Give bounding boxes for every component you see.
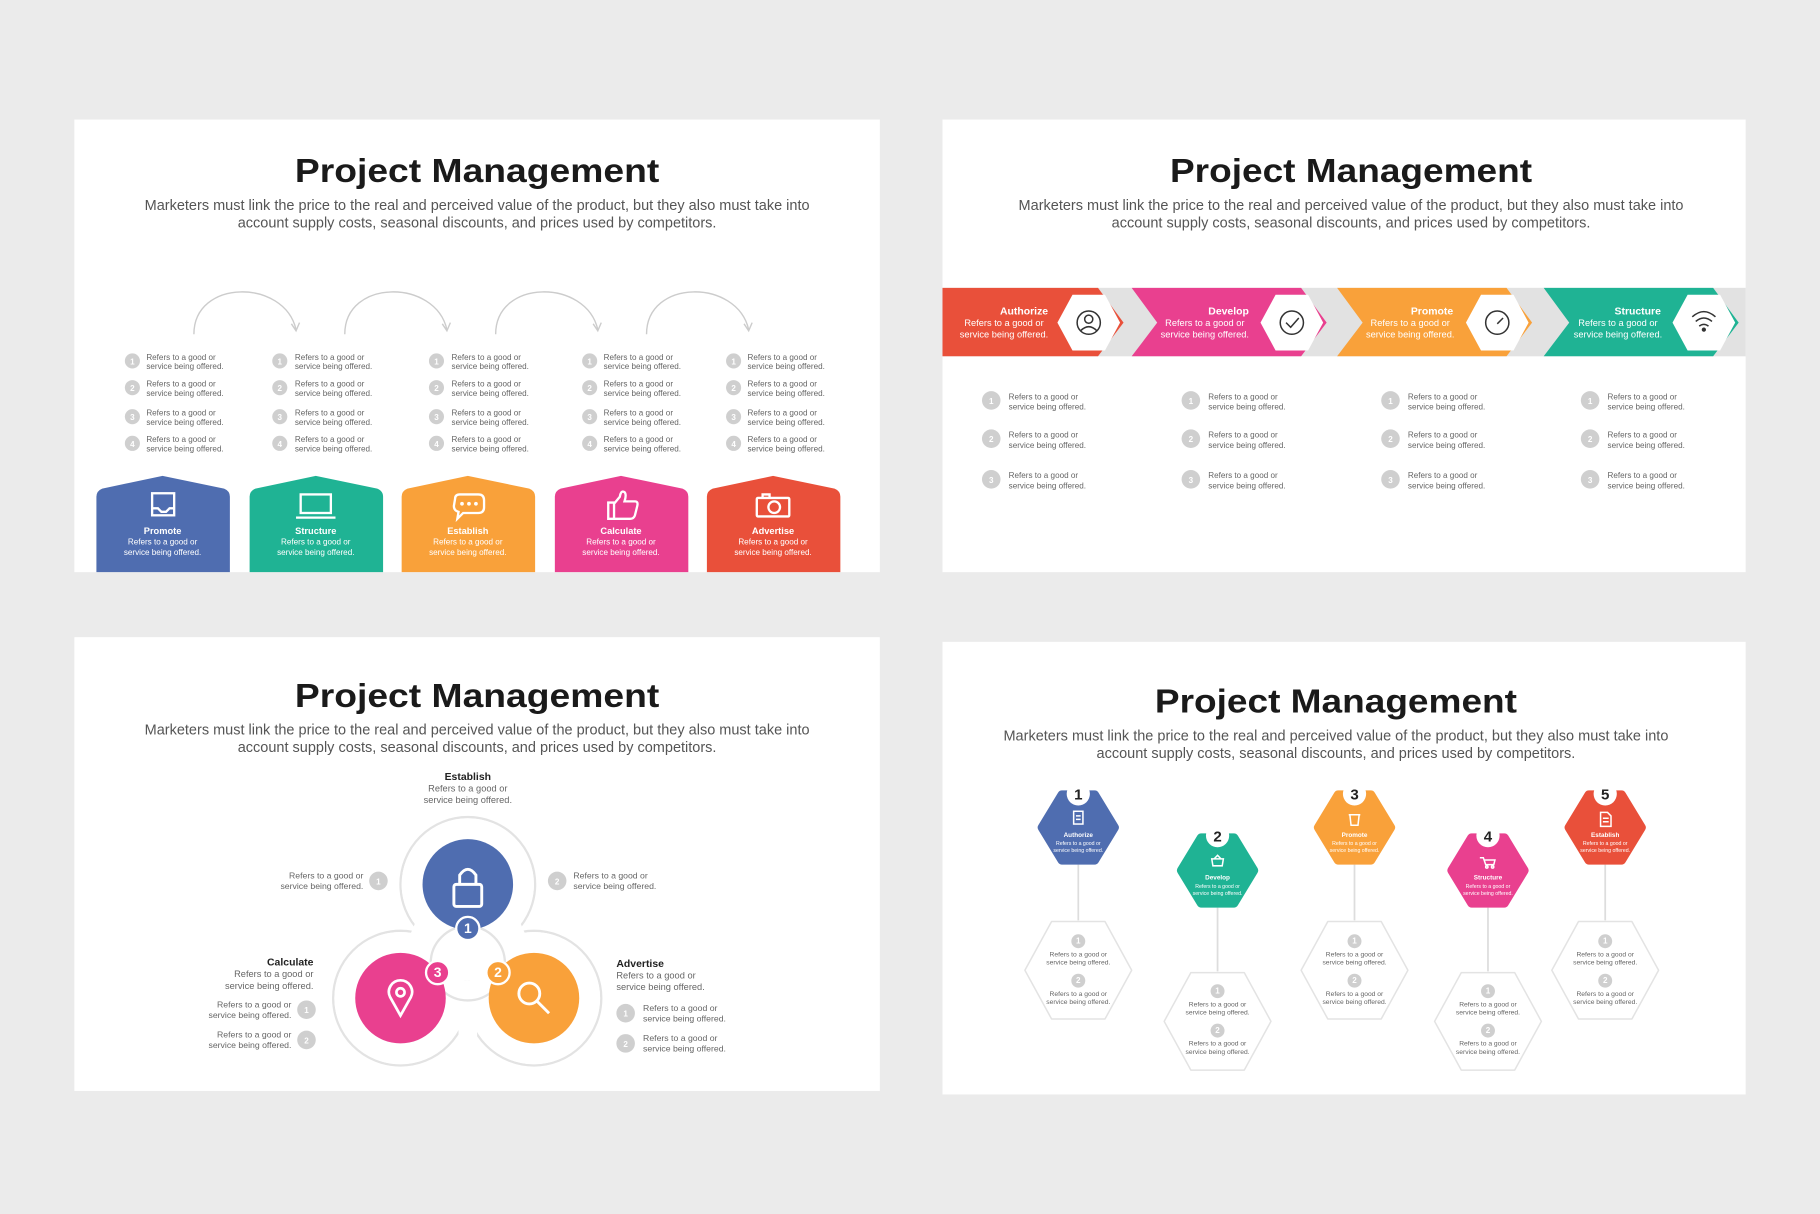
label: Establish bbox=[424, 772, 512, 805]
panel: bottom-left trefoil bbox=[74, 637, 880, 1091]
numbered lists: service being offered. bbox=[1009, 482, 1086, 491]
numbered lists: Refers to a good or bbox=[146, 379, 216, 388]
numbered lists: service being offered. bbox=[146, 444, 224, 453]
icon: check bbox=[1280, 311, 1303, 334]
step 5 Establish: Establish bbox=[1591, 832, 1619, 839]
numbered lists: Refers to a good or bbox=[1009, 431, 1078, 440]
numbered lists: 4 bbox=[130, 440, 135, 449]
numbered lists: 1 bbox=[1189, 397, 1194, 406]
numbered lists: 3 bbox=[278, 413, 283, 422]
step 2 Develop: Develop bbox=[1205, 875, 1230, 882]
numbered lists: Refers to a good or bbox=[1009, 392, 1078, 401]
label: Calculate: 1 bbox=[304, 1006, 309, 1015]
items: top left and right: 2 bbox=[555, 877, 560, 886]
card: Promote: service being offered. bbox=[124, 548, 201, 557]
numbered lists bbox=[125, 353, 825, 453]
step 5 Establish: 5 bbox=[1601, 787, 1609, 804]
items: top left and right: service being offered. bbox=[573, 881, 656, 891]
title: Project Management bbox=[295, 678, 659, 715]
label: Advertise: Refers to a good or bbox=[643, 1033, 718, 1043]
label: Calculate: service being offered. bbox=[208, 1040, 291, 1050]
detail texts: 2 bbox=[1603, 976, 1608, 985]
numbered lists: 2 bbox=[1189, 435, 1194, 444]
numbered lists: service being offered. bbox=[604, 362, 681, 371]
segment: Structure bbox=[1544, 288, 1739, 356]
card: Promote: Promote bbox=[144, 526, 181, 536]
subtitle bbox=[145, 198, 810, 231]
step 5 Establish: Refers to a good or bbox=[1583, 841, 1628, 847]
numbered lists: 2 bbox=[731, 384, 736, 393]
card: Structure: Structure bbox=[295, 526, 336, 536]
card: Structure: Refers to a good or bbox=[281, 537, 351, 546]
numbered lists: service being offered. bbox=[1009, 403, 1086, 412]
detail texts: service being offered. bbox=[1046, 999, 1110, 1006]
numbered lists: service being offered. bbox=[748, 362, 825, 371]
detail texts: Refers to a good or bbox=[1576, 951, 1635, 958]
label: Advertise: Refers to a good or bbox=[616, 970, 696, 980]
numbered lists: 4 bbox=[278, 440, 283, 449]
numbered lists: service being offered. bbox=[146, 418, 224, 427]
label: Calculate: Calculate bbox=[267, 958, 314, 969]
numbered lists: 4 bbox=[434, 440, 439, 449]
detail texts: service being offered. bbox=[1456, 1009, 1520, 1016]
numbered lists: service being offered. bbox=[1608, 441, 1685, 450]
detail texts: service being offered. bbox=[1456, 1049, 1520, 1056]
icon: lock bbox=[454, 869, 482, 906]
label: Establish: service being offered. bbox=[424, 795, 512, 805]
numbered lists: Refers to a good or bbox=[1608, 392, 1677, 401]
label: Advertise bbox=[616, 959, 726, 1054]
label: Advertise: 2 bbox=[623, 1040, 628, 1049]
numbered lists: Refers to a good or bbox=[1009, 471, 1078, 480]
numbered lists: service being offered. bbox=[1608, 482, 1685, 491]
detail texts: 1 bbox=[1486, 986, 1491, 995]
numbered lists: service being offered. bbox=[1408, 403, 1485, 412]
step 4 Structure: Refers to a good or bbox=[1466, 884, 1511, 890]
subtitle: account supply costs, seasonal discounts, and prices used by competitors. bbox=[1112, 215, 1590, 231]
detail texts: service being offered. bbox=[1046, 959, 1110, 966]
items: top left and right: Refers to a good or bbox=[289, 871, 363, 881]
badges: 2 bbox=[494, 964, 502, 980]
numbered lists: 2 bbox=[1588, 435, 1593, 444]
label: Calculate: service being offered. bbox=[208, 1010, 291, 1020]
card: Structure bbox=[250, 476, 383, 572]
step 3 Promote: 3 bbox=[1350, 787, 1359, 804]
numbered lists: Refers to a good or bbox=[748, 435, 817, 444]
numbered lists: Refers to a good or bbox=[146, 408, 216, 417]
segment: Structure: Refers to a good or bbox=[1578, 318, 1658, 328]
panel: top-left arrows and houses bbox=[74, 120, 880, 572]
label: Advertise: service being offered. bbox=[643, 1013, 726, 1023]
step 4 Structure: service being offered. bbox=[1463, 891, 1513, 897]
subtitle: account supply costs, seasonal discounts, and prices used by competitors. bbox=[238, 740, 716, 756]
numbered lists: Refers to a good or bbox=[295, 379, 365, 388]
numbered lists: 3 bbox=[1588, 476, 1593, 485]
numbered lists: Refers to a good or bbox=[604, 379, 673, 388]
icon: clipboard bbox=[1074, 811, 1083, 824]
numbered lists: Refers to a good or bbox=[452, 435, 521, 444]
subtitle: Marketers must link the price to the real and perceived value of the product, but they also must take into bbox=[1019, 198, 1684, 214]
numbered lists: Refers to a good or bbox=[604, 408, 673, 417]
numbered lists: 1 bbox=[731, 357, 736, 366]
step 5 Establish bbox=[1569, 782, 1641, 860]
detail texts: Refers to a good or bbox=[1050, 951, 1108, 958]
step 2 Develop: 2 bbox=[1213, 828, 1222, 845]
items: top left and right: 1 bbox=[376, 877, 381, 886]
detail texts: 1 bbox=[1603, 937, 1608, 946]
detail texts: 2 bbox=[1352, 976, 1357, 985]
label: Calculate: Refers to a good or bbox=[217, 1030, 291, 1040]
numbered lists: service being offered. bbox=[295, 444, 372, 453]
detail texts: service being offered. bbox=[1322, 999, 1387, 1006]
numbered lists: service being offered. bbox=[1408, 441, 1485, 450]
segment: Promote: Promote bbox=[1411, 307, 1453, 318]
icon: trash bbox=[1349, 815, 1360, 825]
numbered lists: 1 bbox=[434, 357, 439, 366]
segment: Promote: Refers to a good or bbox=[1371, 318, 1450, 328]
numbered lists: service being offered. bbox=[452, 362, 529, 371]
icon: location pin bbox=[389, 980, 412, 1016]
segment: Authorize: Refers to a good or bbox=[964, 318, 1044, 328]
numbered lists: service being offered. bbox=[604, 389, 681, 398]
card: Structure: service being offered. bbox=[277, 548, 354, 557]
segment: Structure: Structure bbox=[1615, 307, 1661, 318]
numbered lists: 1 bbox=[130, 357, 135, 366]
card: Establish: service being offered. bbox=[429, 548, 507, 557]
numbered lists: service being offered. bbox=[146, 362, 224, 371]
badges: 1 bbox=[464, 920, 472, 936]
segment: Authorize: Authorize bbox=[1000, 307, 1048, 318]
step 1 Authorize: service being offered. bbox=[1053, 848, 1103, 854]
numbered lists: Refers to a good or bbox=[604, 353, 673, 362]
detail texts: Refers to a good or bbox=[1459, 1001, 1517, 1008]
subtitle: Marketers must link the price to the real and perceived value of the product, but they also must take into bbox=[1003, 728, 1668, 744]
subtitle: Marketers must link the price to the real and perceived value of the product, but they also must take into bbox=[145, 198, 810, 214]
numbered lists: Refers to a good or bbox=[1408, 392, 1478, 401]
subtitle: account supply costs, seasonal discounts, and prices used by competitors. bbox=[238, 215, 716, 231]
panel: top-right chevron band bbox=[942, 120, 1746, 572]
numbered lists: Refers to a good or bbox=[295, 353, 365, 362]
numbered lists: 2 bbox=[278, 384, 283, 393]
detail texts: 2 bbox=[1076, 976, 1081, 985]
step 1 Authorize: Refers to a good or bbox=[1056, 841, 1101, 847]
card: Calculate: Refers to a good or bbox=[586, 537, 656, 546]
card: Establish bbox=[402, 476, 535, 572]
numbered lists: 2 bbox=[989, 435, 994, 444]
numbered lists: 4 bbox=[587, 440, 592, 449]
card: Calculate bbox=[555, 476, 688, 572]
icon: chat bbox=[454, 494, 484, 519]
numbered lists: 3 bbox=[731, 413, 736, 422]
label: Advertise: 1 bbox=[623, 1010, 628, 1019]
items: top left and right: Refers to a good or bbox=[573, 871, 648, 881]
label: Advertise: service being offered. bbox=[616, 982, 705, 992]
numbered lists: Refers to a good or bbox=[1608, 471, 1677, 480]
numbered lists: Refers to a good or bbox=[295, 435, 365, 444]
numbered lists: Refers to a good or bbox=[1408, 431, 1478, 440]
detail texts: service being offered. bbox=[1573, 959, 1637, 966]
detail texts: Refers to a good or bbox=[1189, 1001, 1247, 1008]
icon: inbox bbox=[152, 493, 174, 515]
numbered lists: Refers to a good or bbox=[604, 435, 673, 444]
card: Advertise: Refers to a good or bbox=[738, 537, 808, 546]
subtitle: account supply costs, seasonal discounts, and prices used by competitors. bbox=[1097, 746, 1575, 762]
icon: user bbox=[1077, 311, 1100, 334]
segment: Authorize: service being offered. bbox=[960, 330, 1048, 340]
icon: magnifier bbox=[519, 983, 549, 1013]
numbered lists: 3 bbox=[989, 476, 994, 485]
detail texts: Refers to a good or bbox=[1459, 1041, 1517, 1048]
label: Advertise: Advertise bbox=[616, 959, 664, 970]
step 3 Promote: service being offered. bbox=[1330, 848, 1379, 854]
step 4 Structure: Structure bbox=[1474, 875, 1503, 882]
segment: Authorize bbox=[942, 288, 1124, 356]
numbered lists: 1 bbox=[278, 357, 283, 366]
numbered lists: Refers to a good or bbox=[748, 353, 817, 362]
detail texts: 2 bbox=[1215, 1026, 1220, 1035]
detail texts: Refers to a good or bbox=[1326, 991, 1384, 998]
numbered lists: 2 bbox=[130, 384, 135, 393]
numbered lists: service being offered. bbox=[1208, 482, 1286, 491]
detail texts: 1 bbox=[1215, 986, 1220, 995]
detail texts: 1 bbox=[1076, 937, 1081, 946]
detail texts: Refers to a good or bbox=[1326, 951, 1384, 958]
card: Calculate: service being offered. bbox=[582, 548, 660, 557]
numbered lists: 2 bbox=[434, 384, 439, 393]
detail texts: 1 bbox=[1352, 937, 1357, 946]
numbered lists: service being offered. bbox=[1208, 403, 1286, 412]
icon: camera bbox=[757, 494, 789, 516]
card: Promote: Refers to a good or bbox=[128, 537, 198, 546]
numbered lists: service being offered. bbox=[1208, 441, 1286, 450]
items: top left and right: service being offered. bbox=[280, 881, 363, 891]
badges bbox=[426, 917, 510, 984]
detail texts bbox=[1046, 934, 1637, 1056]
title: Project Management bbox=[1155, 684, 1517, 721]
step 2 Develop: Refers to a good or bbox=[1195, 884, 1240, 890]
numbered lists: 3 bbox=[1388, 476, 1393, 485]
numbered lists: Refers to a good or bbox=[146, 353, 216, 362]
numbered lists: service being offered. bbox=[1608, 403, 1685, 412]
panel: bottom-right hexagon timeline bbox=[942, 642, 1746, 1094]
card: Establish: Refers to a good or bbox=[433, 537, 503, 546]
detail texts: service being offered. bbox=[1185, 1009, 1250, 1016]
title: Project Management bbox=[1170, 153, 1532, 190]
numbered lists: service being offered. bbox=[295, 362, 372, 371]
numbered lists: service being offered. bbox=[604, 418, 681, 427]
step 1 Authorize: 1 bbox=[1074, 787, 1082, 804]
numbered lists: service being offered. bbox=[295, 389, 372, 398]
label: Establish: Refers to a good or bbox=[428, 784, 507, 794]
subtitle bbox=[145, 723, 810, 756]
numbered lists: 3 bbox=[130, 413, 135, 422]
connector lines bbox=[1078, 865, 1605, 971]
arrows bbox=[194, 292, 752, 334]
detail texts: service being offered. bbox=[1322, 959, 1387, 966]
numbered lists: service being offered. bbox=[748, 444, 825, 453]
numbered lists: Refers to a good or bbox=[452, 379, 521, 388]
numbered lists: 1 bbox=[989, 397, 994, 406]
label: Calculate: Refers to a good or bbox=[217, 999, 291, 1009]
icon: thumbs up bbox=[608, 492, 638, 519]
icon: wifi bbox=[1692, 312, 1715, 331]
badges: 3 bbox=[434, 964, 442, 980]
label: Calculate: Refers to a good or bbox=[234, 969, 313, 979]
numbered lists: Refers to a good or bbox=[452, 408, 521, 417]
numbered lists: 3 bbox=[1189, 476, 1194, 485]
numbered lists bbox=[982, 391, 1685, 491]
segment: Develop: service being offered. bbox=[1161, 330, 1249, 340]
numbered lists: Refers to a good or bbox=[1208, 431, 1278, 440]
detail hexagons bbox=[1025, 922, 1659, 1070]
numbered lists: Refers to a good or bbox=[748, 379, 817, 388]
segment: Promote bbox=[1337, 288, 1532, 356]
detail texts: Refers to a good or bbox=[1189, 1041, 1247, 1048]
card: Advertise: Advertise bbox=[752, 526, 794, 536]
numbered lists: 4 bbox=[731, 440, 736, 449]
card: Advertise bbox=[707, 476, 840, 572]
numbered lists: Refers to a good or bbox=[452, 353, 521, 362]
numbered lists: 1 bbox=[1588, 397, 1593, 406]
step 1 Authorize bbox=[1042, 782, 1114, 860]
card: Calculate: Calculate bbox=[600, 526, 642, 536]
step 3 Promote: Refers to a good or bbox=[1332, 841, 1377, 847]
label: Calculate: service being offered. bbox=[225, 981, 313, 991]
numbered lists: 2 bbox=[1388, 435, 1393, 444]
label: Calculate: 2 bbox=[304, 1036, 309, 1045]
label: Establish: Establish bbox=[445, 772, 491, 783]
numbered lists: Refers to a good or bbox=[295, 408, 365, 417]
items: top left and right bbox=[280, 871, 656, 891]
numbered lists: service being offered. bbox=[748, 389, 825, 398]
step 4 Structure: 4 bbox=[1484, 828, 1493, 845]
numbered lists: service being offered. bbox=[452, 418, 529, 427]
icon: cart bbox=[1480, 858, 1495, 868]
numbered lists: service being offered. bbox=[146, 389, 224, 398]
numbered lists: service being offered. bbox=[1009, 441, 1086, 450]
card: Establish: Establish bbox=[447, 526, 489, 536]
segment: Develop bbox=[1132, 288, 1327, 356]
numbered lists: Refers to a good or bbox=[1208, 392, 1278, 401]
step 5 Establish: service being offered. bbox=[1580, 848, 1630, 854]
label: Calculate bbox=[208, 958, 316, 1050]
numbered lists: Refers to a good or bbox=[1408, 471, 1478, 480]
card: Advertise: service being offered. bbox=[734, 548, 812, 557]
segment: Structure: service being offered. bbox=[1574, 330, 1662, 340]
numbered lists: service being offered. bbox=[1408, 482, 1485, 491]
icon: basket bbox=[1212, 855, 1223, 866]
numbered lists: 1 bbox=[587, 357, 592, 366]
trefoil diagram bbox=[333, 817, 601, 1065]
title: Project Management bbox=[295, 153, 659, 190]
subtitle bbox=[1019, 198, 1684, 231]
step 2 Develop: service being offered. bbox=[1193, 891, 1242, 897]
label: Advertise: Refers to a good or bbox=[643, 1003, 718, 1013]
label: Advertise: service being offered. bbox=[643, 1044, 726, 1054]
subtitle: Marketers must link the price to the real and perceived value of the product, but they also must take into bbox=[145, 723, 810, 739]
numbered lists: service being offered. bbox=[452, 444, 529, 453]
numbered lists: Refers to a good or bbox=[748, 408, 817, 417]
icon: gauge bbox=[1486, 311, 1509, 334]
detail texts: Refers to a good or bbox=[1576, 991, 1635, 998]
numbered lists: 2 bbox=[587, 384, 592, 393]
numbered lists: service being offered. bbox=[748, 418, 825, 427]
step 1 Authorize: Authorize bbox=[1064, 832, 1093, 839]
numbered lists: Refers to a good or bbox=[1608, 431, 1677, 440]
subtitle bbox=[1003, 728, 1668, 762]
detail texts: service being offered. bbox=[1573, 999, 1637, 1006]
numbered lists: Refers to a good or bbox=[146, 435, 216, 444]
numbered lists: service being offered. bbox=[452, 389, 529, 398]
card: Promote bbox=[96, 476, 230, 572]
numbered lists: 1 bbox=[1388, 397, 1393, 406]
numbered lists: service being offered. bbox=[295, 418, 372, 427]
numbered lists: Refers to a good or bbox=[1208, 471, 1278, 480]
segment: Develop: Develop bbox=[1208, 307, 1249, 318]
icon: document bbox=[1601, 812, 1611, 826]
icon: laptop bbox=[296, 494, 335, 518]
numbered lists: 3 bbox=[587, 413, 592, 422]
segment: Develop: Refers to a good or bbox=[1165, 318, 1244, 328]
detail texts: Refers to a good or bbox=[1050, 991, 1108, 998]
numbered lists: service being offered. bbox=[604, 444, 681, 453]
step 3 Promote bbox=[1319, 782, 1390, 860]
detail texts: 2 bbox=[1486, 1026, 1491, 1035]
step 2 Develop bbox=[1182, 824, 1254, 903]
detail texts: service being offered. bbox=[1185, 1049, 1250, 1056]
step 4 Structure bbox=[1452, 824, 1524, 903]
step 3 Promote: Promote bbox=[1342, 832, 1368, 839]
segment: Promote: service being offered. bbox=[1366, 330, 1454, 340]
numbered lists: 3 bbox=[434, 413, 439, 422]
